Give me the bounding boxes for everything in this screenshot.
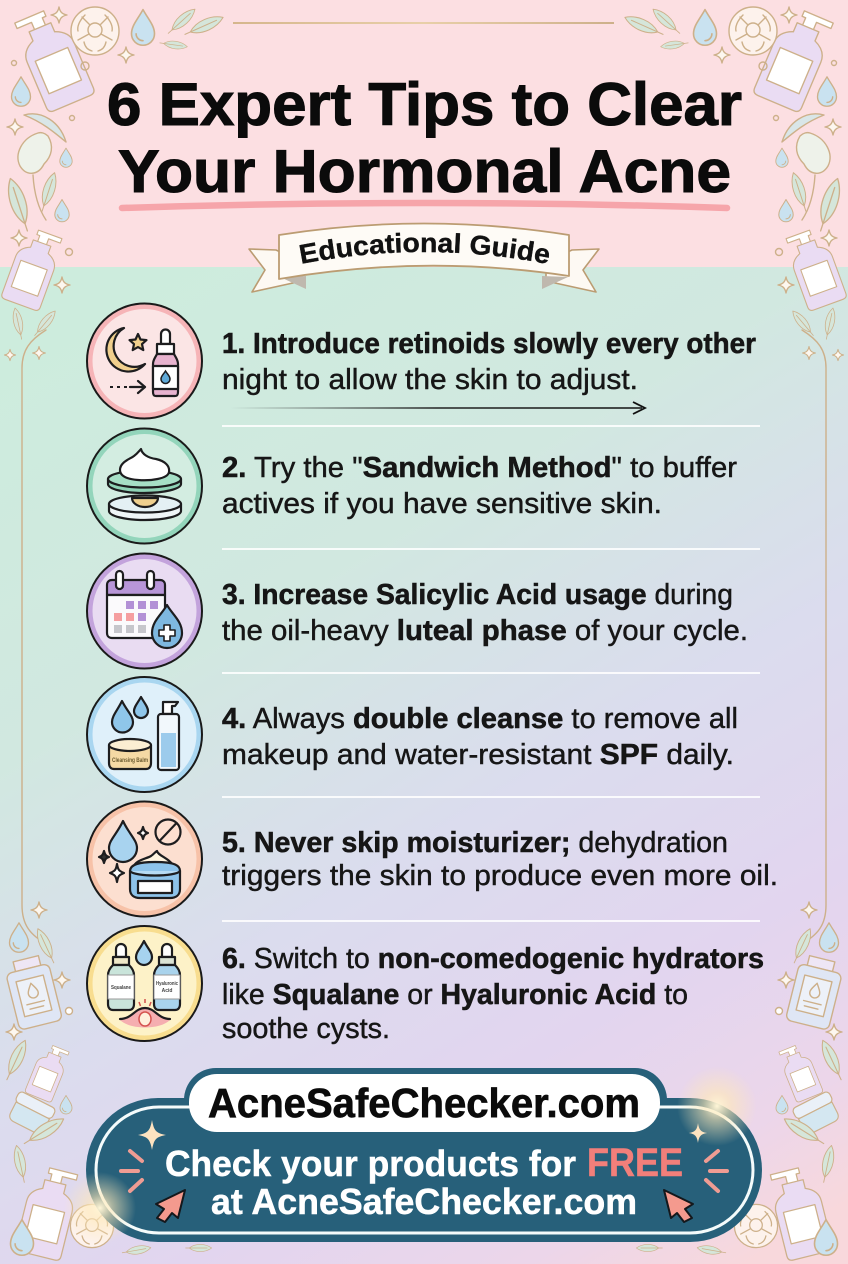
- tip 3 icon: cycle calendar: [87, 554, 202, 668]
- tip 1 icon: retinoid at night: [87, 304, 202, 418]
- tip 4 icon: double cleanse: Cleansing Balm: [112, 757, 148, 764]
- call to action banner: [64, 1066, 762, 1244]
- tip 6 icon: non-comedogenic hydrators: Squalane: [111, 985, 131, 991]
- tip 4 text: makeup and water-resistant SPF daily.: [222, 739, 734, 771]
- title: Your Hormonal Acne: [118, 138, 731, 205]
- banner text: [165, 1141, 683, 1222]
- decorative corner border: right: [623, 5, 847, 1261]
- cursor arrow: right: [664, 1190, 693, 1222]
- tip 5 text: [222, 827, 778, 892]
- tip 5 text: 5. Never skip moisturizer; dehydration: [222, 827, 728, 859]
- burst rays: [121, 1151, 727, 1191]
- title: [107, 71, 742, 205]
- tip 1 text: [222, 328, 756, 396]
- tip 6 icon: non-comedogenic hydrators: Hyaluronic: [156, 981, 178, 987]
- tip 5 icon: moisturizer: [87, 802, 202, 916]
- tip 3 text: [222, 579, 748, 647]
- ribbon badge: Educational Guide: [248, 222, 600, 293]
- ribbon badge: Educational Guide: Educational Guide: [299, 232, 550, 264]
- tip 1 text: 1. Introduce retinoids slowly every other: [222, 328, 756, 360]
- tip 6 text: [222, 943, 764, 1045]
- tip 6 text: soothe cysts.: [222, 1013, 390, 1045]
- cursor arrow: left: [156, 1190, 185, 1222]
- progress arrow: [230, 402, 645, 414]
- tip 6 text: 6. Switch to non-comedogenic hydrators: [222, 943, 764, 975]
- title: 6 Expert Tips to Clear: [107, 71, 742, 138]
- tip 4 icon: double cleanse: [87, 677, 202, 792]
- tip 5 text: triggers the skin to produce even more oil.: [222, 860, 778, 892]
- tip 3 text: 3. Increase Salicylic Acid usage during: [222, 579, 733, 611]
- tip 2 text: actives if you have sensitive skin.: [222, 488, 662, 520]
- tip 6 text: like Squalane or Hyaluronic Acid to: [222, 979, 688, 1011]
- title underline: [122, 203, 727, 208]
- tip 1 text: night to allow the skin to adjust.: [222, 364, 638, 396]
- tip 2 text: 2. Try the "Sandwich Method" to buffer: [222, 452, 737, 484]
- divider: [222, 426, 760, 921]
- website pill: AcneSafeChecker.com: [208, 1080, 640, 1126]
- banner text: FREE: [587, 1141, 683, 1185]
- sparkles: [138, 1120, 707, 1150]
- banner text: Check your products for: [165, 1143, 576, 1184]
- tip 4 text: 4. Always double cleanse to remove all: [222, 703, 738, 735]
- tip 6 icon: non-comedogenic hydrators: Acid: [162, 988, 172, 994]
- tip 3 text: the oil-heavy luteal phase of your cycle.: [222, 615, 748, 647]
- banner text: at AcneSafeChecker.com: [211, 1181, 637, 1222]
- tip 6 icon: non-comedogenic hydrators: [87, 926, 202, 1041]
- banner background: [64, 1066, 762, 1244]
- tip 4 text: [222, 703, 738, 771]
- decorative corner border: left: [1, 5, 225, 1261]
- tip 2 icon: sandwich method: [87, 428, 202, 544]
- tip 2 text: [222, 452, 737, 520]
